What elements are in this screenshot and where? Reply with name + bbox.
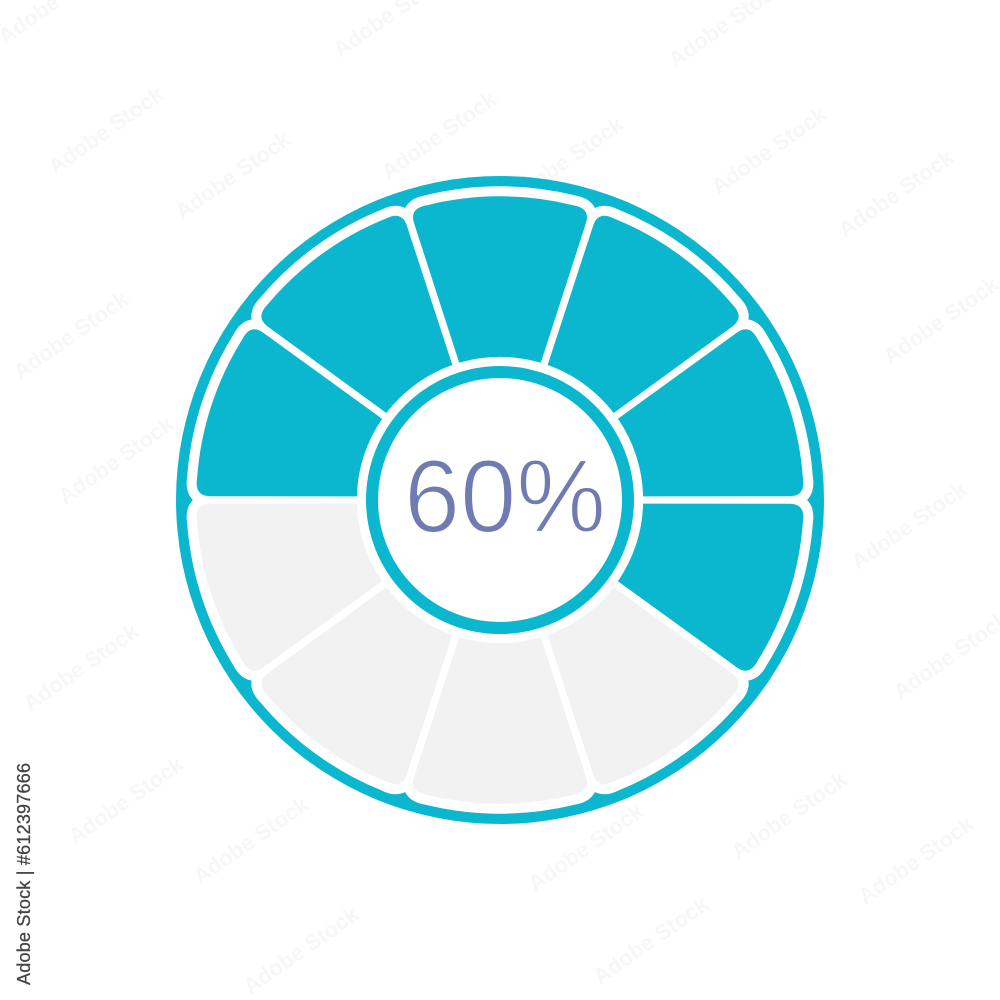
watermark: Adobe Stock (847, 476, 972, 574)
watermark: Adobe Stock (239, 901, 364, 999)
watermark: Adobe Stock (524, 798, 649, 896)
watermark: Adobe Stock (589, 891, 714, 989)
watermark: Adobe Stock (879, 271, 1000, 369)
watermark: Adobe Stock (54, 411, 179, 509)
filled segments: 60 percent (184, 196, 816, 677)
watermark: Adobe Stock (854, 811, 979, 909)
watermark: Adobe Stock (834, 144, 959, 242)
watermark: Adobe Stock (44, 81, 169, 179)
white segment outlines (184, 196, 816, 804)
watermark: Adobe Stock (377, 86, 502, 184)
watermark: Adobe Stock (64, 751, 189, 849)
stock id label: Adobe Stock | #612397666 (14, 763, 34, 985)
watermark: Adobe Stock (727, 766, 852, 864)
watermark: Adobe Stock (19, 618, 144, 716)
watermark: Adobe Stock (189, 791, 314, 889)
outer teal ring (176, 176, 824, 824)
watermark: Adobe Stock (707, 101, 832, 199)
watermark: Adobe Stock (504, 111, 629, 209)
percentage value: 60% (404, 439, 606, 555)
center hub (357, 357, 643, 643)
watermark: Adobe Stock (9, 286, 134, 384)
watermark: Adobe Stock (171, 126, 296, 224)
empty segments: remaining 40 percent (184, 460, 749, 804)
